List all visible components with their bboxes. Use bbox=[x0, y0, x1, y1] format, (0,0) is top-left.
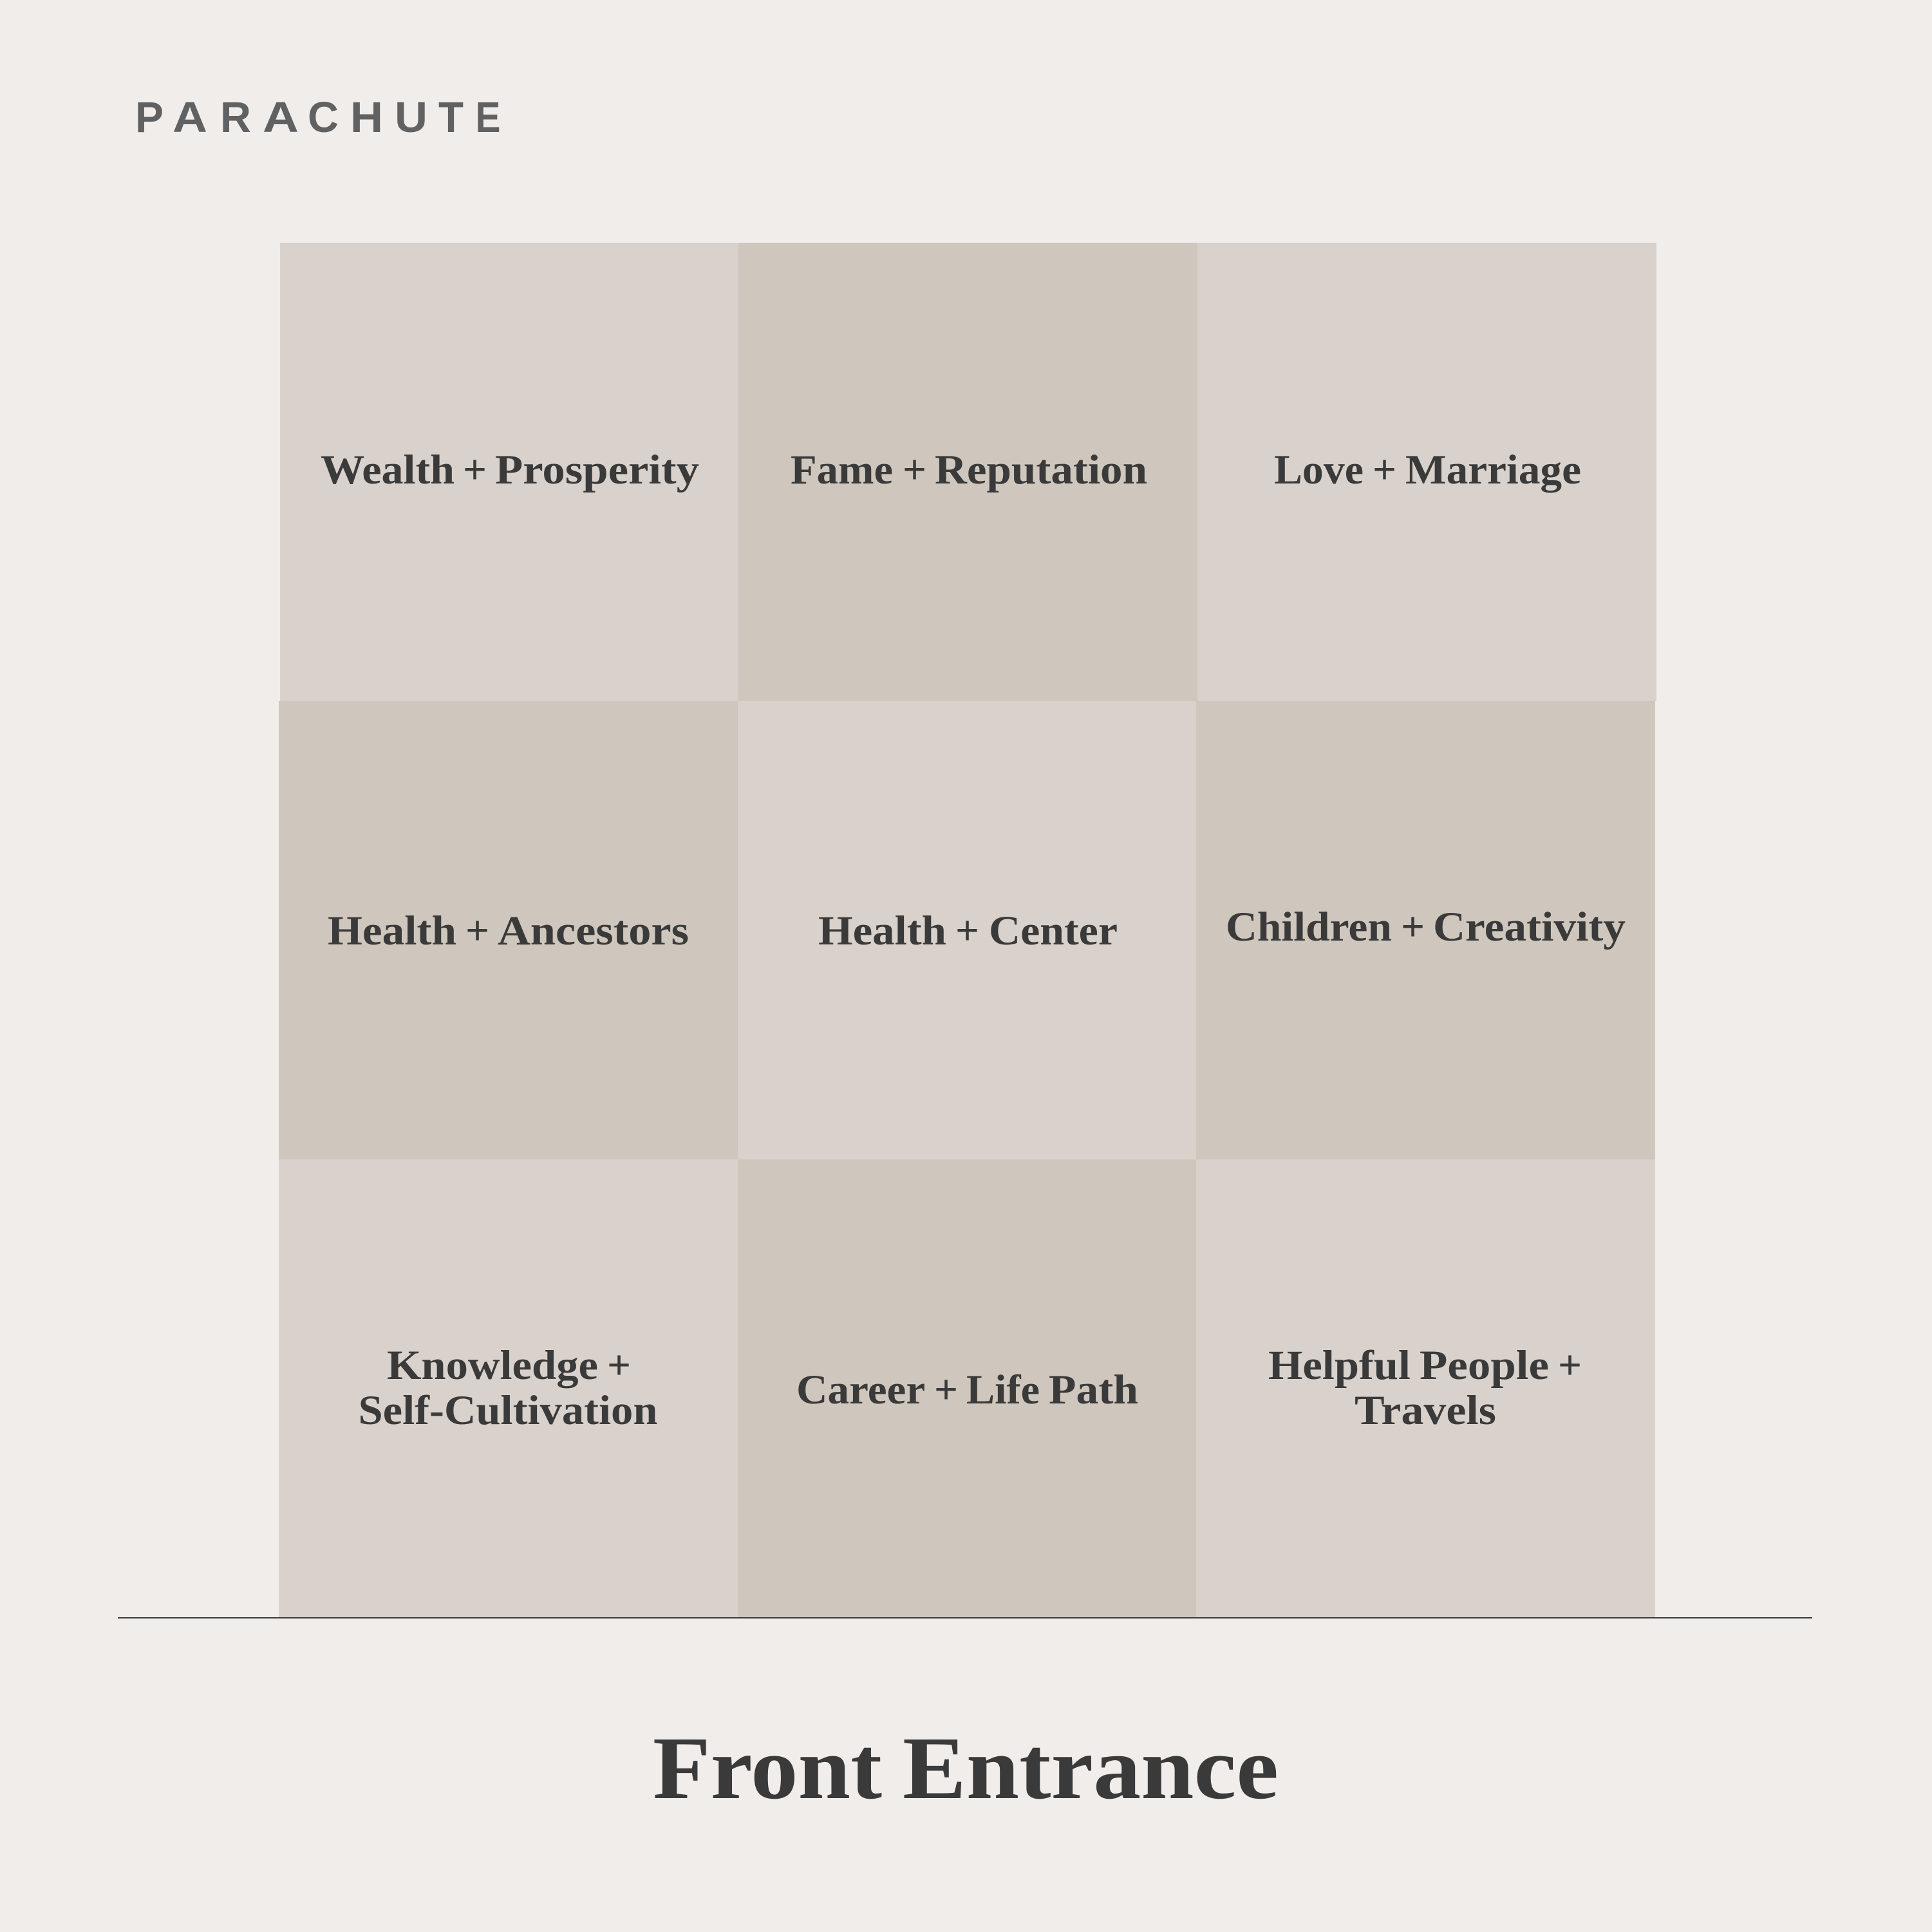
panel: Wealth + Prosperity bbox=[280, 243, 738, 701]
panel: Fame + Reputation: Reputation bbox=[935, 447, 1147, 493]
panel: Health + Center: Center bbox=[989, 908, 1118, 954]
panel: Career + Life Path: Life bbox=[966, 1367, 1040, 1413]
panel: Helpful People + Travels: + bbox=[1558, 1342, 1582, 1389]
panel: Career + Life Path: Career bbox=[796, 1367, 924, 1413]
heading: Front Entrance: Front bbox=[653, 1719, 882, 1818]
panel: Health + Ancestors bbox=[279, 701, 738, 1159]
logo: PARACHUTE: P bbox=[135, 93, 164, 142]
panel: Knowledge + Self-Cultivation: Self-Cultivation bbox=[358, 1387, 658, 1434]
panel: Love + Marriage: + bbox=[1373, 447, 1396, 493]
logo: PARACHUTE: A bbox=[263, 93, 299, 142]
panel: Children + Creativity: + bbox=[1401, 904, 1425, 950]
panel: Knowledge + Self-Cultivation bbox=[279, 1159, 738, 1618]
panel: Children + Creativity bbox=[1196, 701, 1655, 1159]
panel: Children + Creativity: Children bbox=[1226, 904, 1392, 950]
panel: Children + Creativity: Creativity bbox=[1433, 904, 1626, 950]
heading: Front Entrance: Entrance bbox=[903, 1719, 1279, 1818]
logo: PARACHUTE: R bbox=[220, 93, 251, 142]
panel: Health + Center: + bbox=[955, 908, 979, 954]
panel: Wealth + Prosperity: Prosperity bbox=[495, 447, 699, 493]
panel: Health + Ancestors: Health bbox=[328, 908, 456, 954]
entrance wall line bbox=[118, 1617, 1812, 1618]
panel: Fame + Reputation: Fame bbox=[791, 447, 893, 493]
panel: Helpful People + Travels: Travels bbox=[1355, 1387, 1496, 1434]
panel: Helpful People + Travels: People bbox=[1420, 1342, 1549, 1389]
panel: bagua grid bbox=[279, 243, 1656, 1618]
panel: Health + Center: Health bbox=[818, 908, 946, 954]
panel: Health + Ancestors: + bbox=[465, 908, 489, 954]
logo: PARACHUTE: C bbox=[308, 93, 339, 142]
panel: Career + Life Path: + bbox=[934, 1367, 958, 1413]
panel: Knowledge + Self-Cultivation: + bbox=[607, 1342, 631, 1389]
panel: Helpful People + Travels bbox=[1196, 1159, 1655, 1618]
panel: Helpful People + Travels: Helpful bbox=[1268, 1342, 1411, 1389]
panel: Fame + Reputation bbox=[738, 243, 1197, 701]
panel: Wealth + Prosperity: + bbox=[463, 447, 487, 493]
logo: PARACHUTE: A bbox=[173, 93, 207, 142]
panel: Health + Center bbox=[738, 701, 1196, 1159]
logo: PARACHUTE: U bbox=[395, 93, 427, 142]
logo: PARACHUTE: E bbox=[475, 93, 501, 142]
logo: PARACHUTE: T bbox=[438, 93, 464, 142]
panel: Fame + Reputation: + bbox=[903, 447, 926, 493]
panel: Health + Ancestors: Ancestors bbox=[498, 908, 689, 954]
panel: Career + Life Path bbox=[738, 1159, 1196, 1618]
logo: PARACHUTE: H bbox=[350, 93, 383, 142]
panel: Wealth + Prosperity: Wealth bbox=[321, 447, 455, 493]
panel: Career + Life Path: Path bbox=[1049, 1367, 1138, 1413]
panel: Love + Marriage: Marriage bbox=[1405, 447, 1581, 493]
panel: Love + Marriage: Love bbox=[1274, 447, 1364, 493]
panel: Knowledge + Self-Cultivation: Knowledge bbox=[387, 1342, 598, 1389]
panel: Love + Marriage bbox=[1197, 243, 1656, 701]
